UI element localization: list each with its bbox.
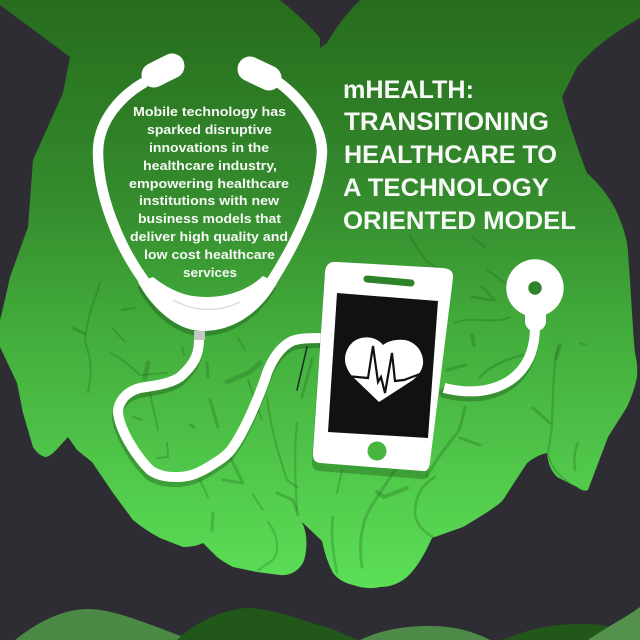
chest piece disc bbox=[506, 259, 564, 317]
stethoscope bbox=[98, 66, 326, 477]
crease: dark fold near phone bbox=[297, 347, 307, 390]
left earpiece bbox=[154, 66, 172, 75]
yoke bbox=[138, 276, 277, 331]
binaural ring bbox=[98, 82, 322, 284]
title: HEALTHCARE TO bbox=[344, 141, 557, 169]
screen bbox=[328, 293, 438, 438]
tube connector bbox=[194, 331, 205, 340]
title bbox=[343, 76, 576, 235]
summary text: sparked disruptive bbox=[147, 122, 272, 137]
title: ORIENTED MODEL bbox=[343, 207, 576, 235]
phone body bbox=[313, 262, 453, 471]
title: TRANSITIONING bbox=[344, 108, 549, 136]
summary text: innovations in the bbox=[149, 140, 269, 155]
right earpiece bbox=[250, 69, 269, 78]
summary text: healthcare industry, bbox=[143, 158, 277, 173]
summary text: deliver high quality and bbox=[130, 229, 288, 244]
summary text: institutions with new bbox=[139, 193, 280, 208]
title: A TECHNOLOGY bbox=[343, 174, 549, 202]
summary text: business models that bbox=[138, 211, 282, 226]
right tube and chest piece bbox=[444, 259, 564, 391]
yoke highlight bbox=[173, 300, 240, 310]
chest piece hole bbox=[528, 281, 542, 295]
summary text bbox=[129, 104, 289, 280]
summary text: Mobile technology has bbox=[133, 104, 286, 119]
smartphone bbox=[313, 262, 453, 471]
heart icon bbox=[345, 337, 423, 402]
summary text: empowering healthcare bbox=[129, 176, 289, 191]
speaker bbox=[367, 279, 411, 283]
tube to phone bbox=[118, 338, 326, 477]
chest piece neck bbox=[525, 312, 546, 332]
home button bbox=[368, 442, 386, 460]
summary text: services bbox=[183, 265, 237, 280]
title: mHEALTH: bbox=[343, 76, 474, 104]
bottom hills bbox=[15, 607, 640, 640]
hand creases bbox=[73, 235, 586, 573]
stethoscope shadows bbox=[117, 281, 534, 482]
summary text: low cost healthcare bbox=[144, 247, 275, 262]
phone shadow bbox=[312, 270, 452, 479]
